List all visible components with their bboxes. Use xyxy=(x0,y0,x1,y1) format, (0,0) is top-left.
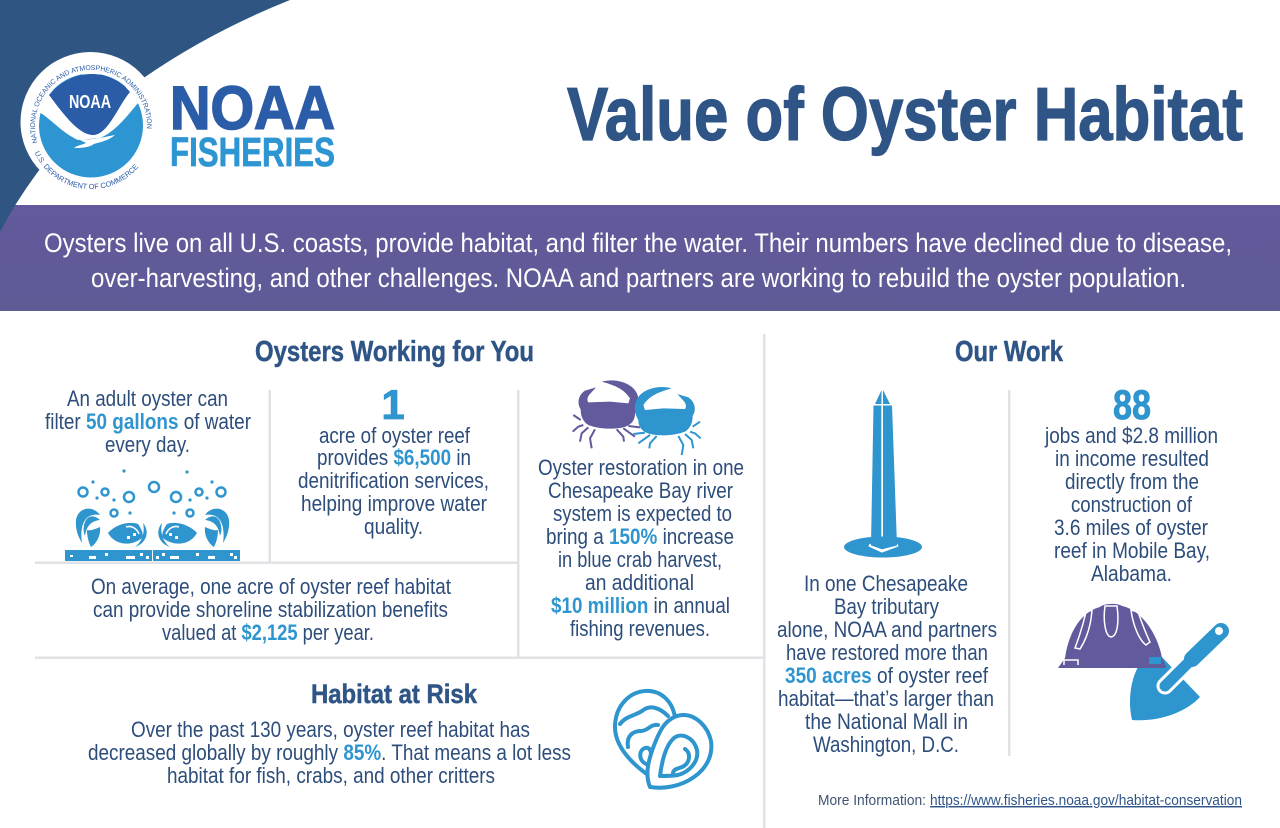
icon: two crabs xyxy=(573,380,701,455)
banner: introduction xyxy=(0,205,1280,311)
icon: Washington Monument xyxy=(844,390,922,558)
heading: Our Work: Our Work xyxy=(955,336,1064,368)
heading: Oysters Working for You: Oysters Working for You xyxy=(255,336,534,368)
logo: NOAA Fisheries wordmark xyxy=(170,74,335,175)
text: blue crab harvest: system is expected to xyxy=(553,501,732,526)
stat: 1 acre of oyster reef: provides $6,500 in xyxy=(317,445,471,470)
stat: 1 acre of oyster reef: denitrification services, xyxy=(298,468,489,493)
stat: 88 jobs: Alabama. xyxy=(1091,561,1172,586)
stat: 88 jobs: jobs and $2.8 million xyxy=(1044,423,1218,448)
stat: 88 jobs: directly from the xyxy=(1065,469,1199,494)
stat: 1 acre of oyster reef: quality. xyxy=(364,514,423,539)
stat: 88 jobs: 3.6 miles of oyster xyxy=(1054,515,1208,540)
text: habitat decline: Over the past 130 years, oyster reef habitat has xyxy=(131,717,530,742)
logo: NOAA seal: U.S. DEPARTMENT OF COMMERCE xyxy=(35,150,138,190)
text: habitat decline xyxy=(88,717,571,788)
text: blue crab harvest: bring a 150% increase xyxy=(546,524,734,549)
text: 350 acres restored: In one Chesapeake xyxy=(804,571,968,596)
stat: 88 jobs: reef in Mobile Bay, xyxy=(1054,538,1210,563)
text: 350 acres restored: Bay tributary xyxy=(834,594,939,619)
text: blue crab harvest xyxy=(538,455,744,641)
text: 350 acres restored: habitat—that’s larger than xyxy=(778,686,994,711)
text: filter 50 gallons: An adult oyster can xyxy=(67,386,228,411)
stat: 88 jobs: 88 xyxy=(1113,381,1151,428)
heading: Habitat at Risk: Habitat at Risk xyxy=(311,679,478,709)
text: filter 50 gallons xyxy=(45,386,251,457)
more information link: https://www.fisheries.noaa.gov/habitat-conservation xyxy=(930,793,1242,809)
text: blue crab harvest: an additional xyxy=(585,570,694,595)
logo: NOAA seal: NOAA xyxy=(69,92,111,112)
text: habitat decline: decreased globally by roughly 85%. That means a lot less xyxy=(88,740,571,765)
text: habitat decline: habitat for fish, crabs, and other critters xyxy=(167,763,495,788)
stat: 1 acre of oyster reef: acre of oyster reef xyxy=(319,423,471,448)
text: 350 acres restored: have restored more than xyxy=(786,640,988,665)
text: 350 acres restored: the National Mall in xyxy=(805,709,968,734)
text: shoreline stabilization xyxy=(91,574,451,645)
text: shoreline stabilization: On average, one acre of oyster reef habitat xyxy=(91,574,451,599)
text: filter 50 gallons: every day. xyxy=(105,432,190,457)
stat: 88 jobs: in income resulted xyxy=(1055,446,1209,471)
icon: oyster shell xyxy=(615,691,711,788)
logo: NOAA Fisheries wordmark: FISHERIES xyxy=(170,129,335,175)
text: 350 acres restored: alone, NOAA and partners xyxy=(777,617,997,642)
navy corner shape xyxy=(0,0,290,232)
text: blue crab harvest: in blue crab harvest, xyxy=(558,547,722,572)
stat: 1 acre of oyster reef: 1 xyxy=(381,381,405,428)
text: 350 acres restored: Washington, D.C. xyxy=(813,732,959,757)
icon: oysters filtering water xyxy=(65,469,240,561)
section dividers xyxy=(35,334,1010,828)
stat: 1 acre of oyster reef xyxy=(298,381,489,539)
text: blue crab harvest: fishing revenues. xyxy=(570,616,710,641)
text: shoreline stabilization: can provide shoreline stabilization benefits xyxy=(93,597,448,622)
text: shoreline stabilization: valued at $2,125 per year. xyxy=(162,620,374,645)
more information link: More Information: xyxy=(818,793,926,809)
icon: hard hat and trowel xyxy=(1058,604,1223,720)
logo: NOAA seal: NATIONAL OCEANIC AND ATMOSPHERIC ADMINISTRATION xyxy=(30,65,152,144)
text: blue crab harvest: $10 million in annual xyxy=(551,593,730,618)
stat: 1 acre of oyster reef: helping improve water xyxy=(301,491,487,516)
text: filter 50 gallons: filter 50 gallons of water xyxy=(45,409,251,434)
text: 350 acres restored xyxy=(777,571,997,757)
text: blue crab harvest: Oyster restoration in one xyxy=(538,455,744,480)
logo: NOAA Fisheries wordmark: NOAA xyxy=(170,74,335,142)
stat: 88 jobs xyxy=(1044,381,1218,586)
text: 350 acres restored: 350 acres of oyster reef xyxy=(785,663,989,688)
logo: NOAA seal xyxy=(20,52,152,190)
text: blue crab harvest: Chesapeake Bay river xyxy=(548,478,733,503)
stat: 88 jobs: construction of xyxy=(1071,492,1193,517)
